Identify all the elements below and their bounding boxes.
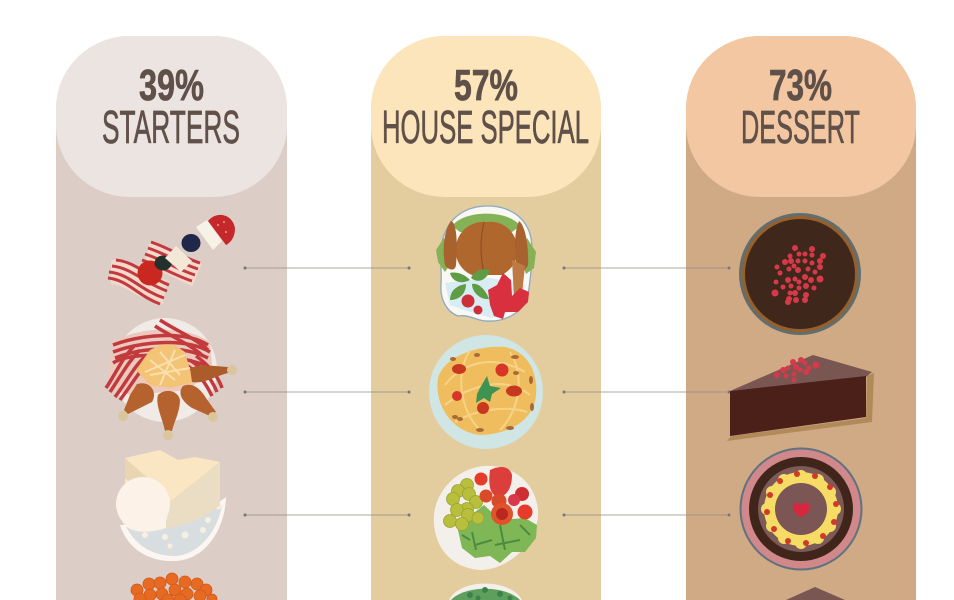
heading: house special percentage: 57%	[454, 61, 518, 110]
connector: row 1 house special to dessert	[563, 267, 730, 269]
icon: cheese and plate	[116, 450, 226, 561]
icon: spaghetti plate	[429, 335, 543, 449]
icon: decorated round cake	[740, 448, 862, 570]
connector: row 2 starters to house special	[244, 391, 410, 393]
icon: caviar bowl	[131, 573, 217, 600]
connector: row 1 starters to house special	[244, 267, 410, 269]
icon: roast turkey plate	[436, 206, 536, 321]
heading: dessert: DESSERT	[741, 101, 860, 153]
panel: house special header	[371, 36, 601, 197]
panel: house special column	[371, 36, 601, 600]
icon: bottom cake slice	[786, 587, 845, 600]
heading: house special: HOUSE SPECIAL	[382, 101, 589, 153]
panel: dessert column	[686, 36, 916, 600]
panel: dessert header	[686, 36, 916, 197]
icon: green bowl	[449, 584, 522, 600]
connector: row 3 house special to dessert	[563, 514, 730, 516]
icon: chocolate cake slice	[727, 355, 874, 441]
icon: bacon and tomato skewer	[108, 215, 235, 304]
panel: starters column	[56, 36, 287, 600]
connector: row 2 house special to dessert	[563, 391, 730, 393]
panel: starters header	[56, 36, 287, 197]
connector: row 3 starters to house special	[244, 514, 410, 516]
heading: starters percentage: 39%	[139, 61, 204, 110]
icon: bacon, fries and chicken plate	[106, 318, 237, 440]
heading: dessert percentage: 73%	[769, 61, 832, 110]
icon: chocolate tart with berries	[739, 213, 861, 335]
icon: fresh salad plate	[434, 466, 538, 570]
heading: starters: STARTERS	[102, 101, 240, 153]
